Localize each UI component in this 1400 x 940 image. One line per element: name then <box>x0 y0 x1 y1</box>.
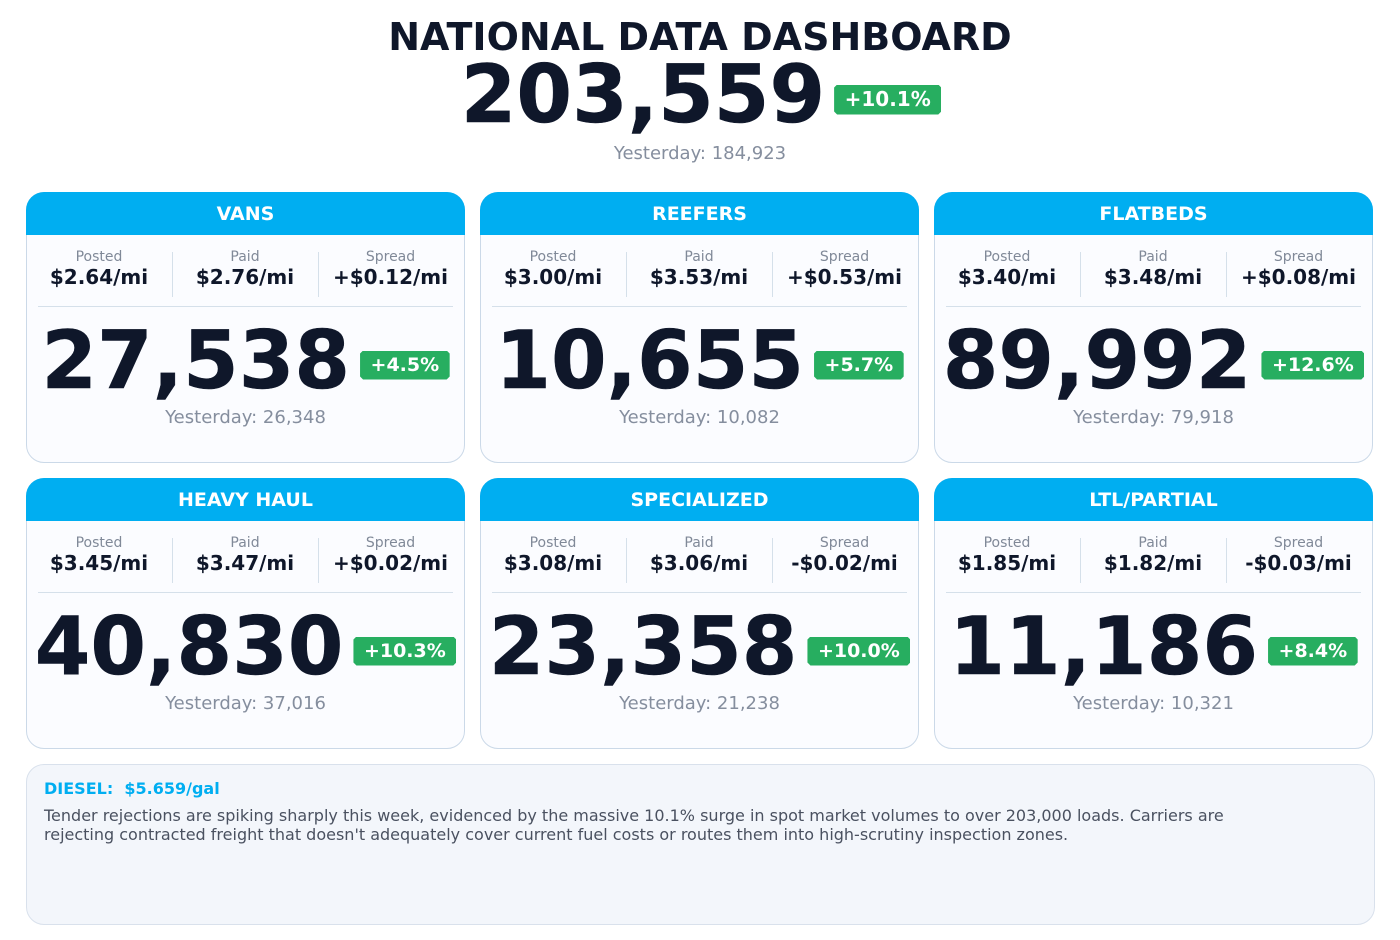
heavy haul posted rate: Posted <box>76 535 122 551</box>
ltl/partial header: LTL/PARTIAL <box>1089 489 1218 511</box>
panel: flatbeds <box>934 192 1373 463</box>
ltl/partial posted rate <box>958 535 1056 575</box>
vans spread: +$0.12/mi <box>333 265 448 289</box>
specialized paid rate <box>650 535 748 575</box>
reefers load count and change: +5.7% <box>825 354 893 376</box>
flatbeds posted rate <box>958 249 1056 289</box>
specialized header <box>480 478 919 521</box>
heavy haul paid rate: Paid <box>230 535 260 551</box>
flatbeds load count and change: 89,992 <box>943 314 1251 407</box>
reefers header: REEFERS <box>652 203 747 225</box>
vans yesterday value: Yesterday: 26,348 <box>165 407 326 428</box>
panel: diesel commentary <box>26 764 1375 925</box>
commentary text <box>44 806 1224 844</box>
ltl/partial spread: Spread <box>1274 535 1323 551</box>
vans posted rate: $2.64/mi <box>50 265 148 289</box>
reefers header <box>480 192 919 235</box>
national total with change badge: 203,559 <box>461 48 825 141</box>
heavy haul yesterday value: Yesterday: 37,016 <box>165 693 326 714</box>
ltl/partial header <box>934 478 1373 521</box>
flatbeds posted rate: $3.40/mi <box>958 265 1056 289</box>
reefers posted rate: Posted <box>530 249 576 265</box>
panel: heavy haul <box>26 478 465 749</box>
specialized posted rate: Posted <box>530 535 576 551</box>
national total with change badge: +10.1% <box>845 86 931 110</box>
panel: vans <box>26 192 465 463</box>
heavy haul posted rate: $3.45/mi <box>50 551 148 575</box>
flatbeds header <box>934 192 1373 235</box>
ltl/partial paid rate: Paid <box>1138 535 1168 551</box>
heavy haul posted rate <box>50 535 148 575</box>
heavy haul load count and change: 40,830 <box>35 600 343 693</box>
ltl/partial load count and change: +8.4% <box>1279 640 1347 662</box>
ltl/partial posted rate: $1.85/mi <box>958 551 1056 575</box>
ltl/partial spread <box>1245 535 1352 575</box>
flatbeds paid rate: Paid <box>1138 249 1168 265</box>
specialized paid rate: $3.06/mi <box>650 551 748 575</box>
reefers spread: Spread <box>820 249 869 265</box>
specialized spread <box>791 535 898 575</box>
reefers spread: +$0.53/mi <box>787 265 902 289</box>
panel: ltl/partial <box>934 478 1373 749</box>
heavy haul paid rate: $3.47/mi <box>196 551 294 575</box>
panel: reefers <box>480 192 919 463</box>
specialized spread: -$0.02/mi <box>791 551 898 575</box>
vans spread: Spread <box>366 249 415 265</box>
ltl/partial load count and change: 11,186 <box>949 600 1258 693</box>
reefers posted rate <box>504 249 602 289</box>
flatbeds load count and change: +12.6% <box>1272 354 1354 376</box>
specialized posted rate <box>504 535 602 575</box>
specialized yesterday value: Yesterday: 21,238 <box>619 693 780 714</box>
vans header: VANS <box>217 203 274 225</box>
specialized header: SPECIALIZED <box>630 489 768 511</box>
flatbeds paid rate: $3.48/mi <box>1104 265 1202 289</box>
ltl/partial yesterday value: Yesterday: 10,321 <box>1073 693 1234 714</box>
national yesterday value: Yesterday: 184,923 <box>614 143 786 164</box>
diesel price: DIESEL: $5.659/gal <box>44 779 220 798</box>
ltl/partial paid rate <box>1104 535 1202 575</box>
reefers spread <box>787 249 902 289</box>
reefers paid rate <box>650 249 748 289</box>
vans posted rate: Posted <box>76 249 122 265</box>
heavy haul spread <box>333 535 448 575</box>
reefers yesterday value: Yesterday: 10,082 <box>619 407 780 428</box>
specialized paid rate: Paid <box>684 535 714 551</box>
heavy haul paid rate <box>196 535 294 575</box>
heavy haul header <box>26 478 465 521</box>
specialized load count and change: +10.0% <box>818 640 900 662</box>
reefers load count and change: 10,655 <box>495 314 804 407</box>
flatbeds paid rate <box>1104 249 1202 289</box>
vans spread <box>333 249 448 289</box>
specialized posted rate: $3.08/mi <box>504 551 602 575</box>
title: NATIONAL DATA DASHBOARD <box>388 15 1012 59</box>
vans load count and change: +4.5% <box>371 354 439 376</box>
vans posted rate <box>50 249 148 289</box>
ltl/partial posted rate: Posted <box>984 535 1030 551</box>
flatbeds header: FLATBEDS <box>1099 203 1208 225</box>
heavy haul spread: Spread <box>366 535 415 551</box>
reefers paid rate: $3.53/mi <box>650 265 748 289</box>
panel: specialized <box>480 478 919 749</box>
flatbeds yesterday value: Yesterday: 79,918 <box>1073 407 1234 428</box>
flatbeds spread: Spread <box>1274 249 1323 265</box>
heavy haul load count and change: +10.3% <box>364 640 446 662</box>
reefers paid rate: Paid <box>684 249 714 265</box>
specialized load count and change: 23,358 <box>489 600 797 693</box>
specialized spread: Spread <box>820 535 869 551</box>
flatbeds spread: +$0.08/mi <box>1241 265 1356 289</box>
vans paid rate: Paid <box>230 249 260 265</box>
ltl/partial paid rate: $1.82/mi <box>1104 551 1202 575</box>
vans header <box>26 192 465 235</box>
flatbeds spread <box>1241 249 1356 289</box>
reefers posted rate: $3.00/mi <box>504 265 602 289</box>
vans load count and change: 27,538 <box>41 314 350 407</box>
vans paid rate: $2.76/mi <box>196 265 294 289</box>
flatbeds posted rate: Posted <box>984 249 1030 265</box>
vans paid rate <box>196 249 294 289</box>
commentary text: Tender rejections are spiking sharply this week, evidenced by the massive 10.1% surge in spot market volumes to over 203,000 loads. Carriers are <box>44 806 1224 825</box>
ltl/partial spread: -$0.03/mi <box>1245 551 1352 575</box>
heavy haul spread: +$0.02/mi <box>333 551 448 575</box>
heavy haul header: HEAVY HAUL <box>178 489 313 511</box>
commentary text: rejecting contracted freight that doesn't adequately cover current fuel costs or routes them into high-scrutiny inspection zones. <box>44 825 1068 844</box>
